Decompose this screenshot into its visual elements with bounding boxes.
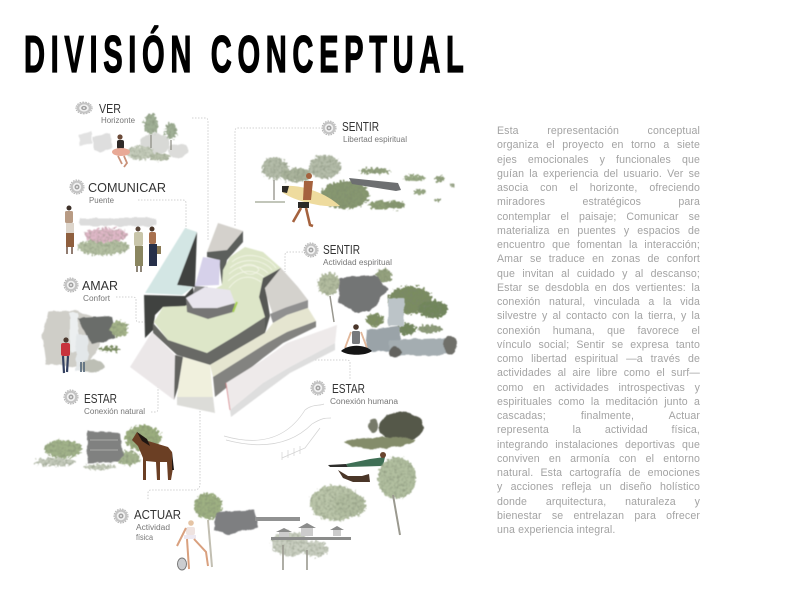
- text block: description: natural. Esta cartografía de emociones: [497, 467, 700, 479]
- label: SENTIR actividad: Actividad espiritual: [323, 258, 392, 267]
- text block: description: [497, 125, 700, 536]
- label: AMAR: [64, 278, 118, 303]
- text block: description: como en actividades introspectivas y: [497, 382, 700, 394]
- text block: description: una experiencia integral.: [497, 524, 615, 536]
- label: ESTAR humana: Conexión humana: [330, 397, 399, 406]
- label: ESTAR natural: Conexión natural: [84, 407, 145, 416]
- vignette: ESTAR conexión humana: [224, 404, 423, 570]
- text block: description: materializa en puentes y espacios de: [497, 225, 700, 237]
- label: SENTIR libertad: SENTIR: [342, 120, 379, 134]
- text block: description: conexión natural, vinculada a la vida: [497, 296, 700, 308]
- vignette: SENTIR actividad espiritual: [318, 269, 457, 357]
- text block: description: y acciones refleja un diseño holístico: [497, 481, 700, 493]
- massing: dark left block: [144, 287, 195, 338]
- text block: description: organiza el proyecto en torno a siete: [497, 139, 700, 151]
- text block: description: donde arquitectura, naturaleza y: [497, 496, 700, 508]
- label: ACTUAR: ACTUAR: [134, 508, 181, 522]
- vignette: VER: [79, 114, 188, 167]
- massing: hexagon plinth: [186, 298, 235, 319]
- massing: beige strip: [210, 308, 316, 377]
- label: SENTIR actividad: [304, 243, 392, 267]
- text block: description: conviven en armonía con el entorno: [497, 453, 700, 465]
- label: SENTIR libertad: Libertad espiritual: [343, 135, 407, 144]
- text block: description: guían la experiencia del usuario. Ver se: [497, 168, 700, 180]
- label: COMUNICAR: [70, 180, 166, 205]
- label: ESTAR humana: ESTAR: [332, 382, 365, 396]
- label: ACTUAR: física: [136, 533, 154, 542]
- label: ESTAR natural: [64, 390, 145, 416]
- label: ESTAR humana: [311, 381, 399, 406]
- text block: description: como libertad espiritual —a través de: [497, 353, 700, 365]
- text block: description: integrando instalaciones deportivas que: [497, 438, 700, 450]
- text block: description: Estar se desdobla en dos vertientes: la: [497, 282, 700, 294]
- man lying and dog: [328, 464, 348, 467]
- sketch bridge: [224, 404, 331, 460]
- label: ACTUAR: Actividad: [136, 523, 170, 532]
- text block: description: Amar se traduce en zonas de confort: [497, 253, 700, 265]
- vignette: ACTUAR: [177, 493, 300, 570]
- massing: lilac slab: [195, 257, 220, 286]
- label: AMAR: AMAR: [82, 279, 118, 293]
- label: VER: Horizonte: [101, 116, 136, 125]
- label: VER: [76, 102, 136, 125]
- text block: description: ejes emocionales y funcionales que: [497, 154, 700, 166]
- text block: description: cascadas; finalmente, Actuar: [497, 410, 700, 422]
- text block: description: silvestre y al contacto con la tierra, y la: [497, 310, 700, 322]
- pavilions: [271, 523, 351, 540]
- text block: description: contemplar el paisaje; Comunicar se: [497, 210, 700, 222]
- label: SENTIR libertad: [322, 120, 407, 144]
- label: VER: VER: [99, 102, 121, 116]
- text block: description: representa la actividad física,: [497, 424, 700, 436]
- vignette: AMAR: [42, 310, 128, 373]
- vignette: COMUNICAR: [65, 206, 161, 272]
- massing: bottom centre slab: [177, 357, 213, 397]
- horse: [132, 432, 174, 480]
- massing: teal glass wedge: [145, 228, 197, 295]
- vignette: SENTIR libertad espiritual: [255, 155, 454, 226]
- text block: description: conexión humana, que favorece el: [497, 324, 700, 336]
- vignette: ESTAR conexión natural: [35, 425, 174, 480]
- text block: description: vínculo social; Sentir se expresa tanto: [497, 339, 700, 351]
- label: ACTUAR: [114, 508, 181, 542]
- text block: description: Esta representación conceptual: [497, 125, 700, 137]
- massing: right pale slab: [226, 325, 337, 410]
- massing: dark terrace band: [153, 317, 265, 365]
- text block: description: actividades al aire libre como el surf—: [497, 367, 700, 379]
- text block: description: miradores estratégicos para: [497, 196, 700, 208]
- text block: description: asocia con el horizonte, ofreciendo: [497, 182, 700, 194]
- label: ESTAR natural: ESTAR: [84, 392, 117, 406]
- massing: green contoured terrace: [154, 247, 281, 353]
- text block: description: bienestar se entrelazan para ofrecer: [497, 510, 700, 522]
- text block: description: encuentro que fomentan la interacción;: [497, 239, 700, 251]
- central massing model: [130, 223, 337, 417]
- massing: upper grey block: [207, 223, 243, 252]
- massing: right grey terrace: [265, 268, 308, 315]
- label: COMUNICAR: COMUNICAR: [88, 181, 166, 195]
- label: SENTIR actividad: SENTIR: [323, 243, 360, 257]
- label: COMUNICAR: Puente: [89, 196, 115, 205]
- leader lines connecting labels to the massing: [116, 118, 350, 500]
- massing: left pale slab: [130, 332, 175, 400]
- text block: description: espirituales como la meditación junto a: [497, 396, 700, 408]
- title: DIVISIÓN CONCEPTUAL: [24, 24, 469, 83]
- label: AMAR: Confort: [83, 294, 111, 303]
- text block: description: que invitan al cuidado y al descanso;: [497, 268, 700, 280]
- massing: topographic contours: [228, 255, 276, 288]
